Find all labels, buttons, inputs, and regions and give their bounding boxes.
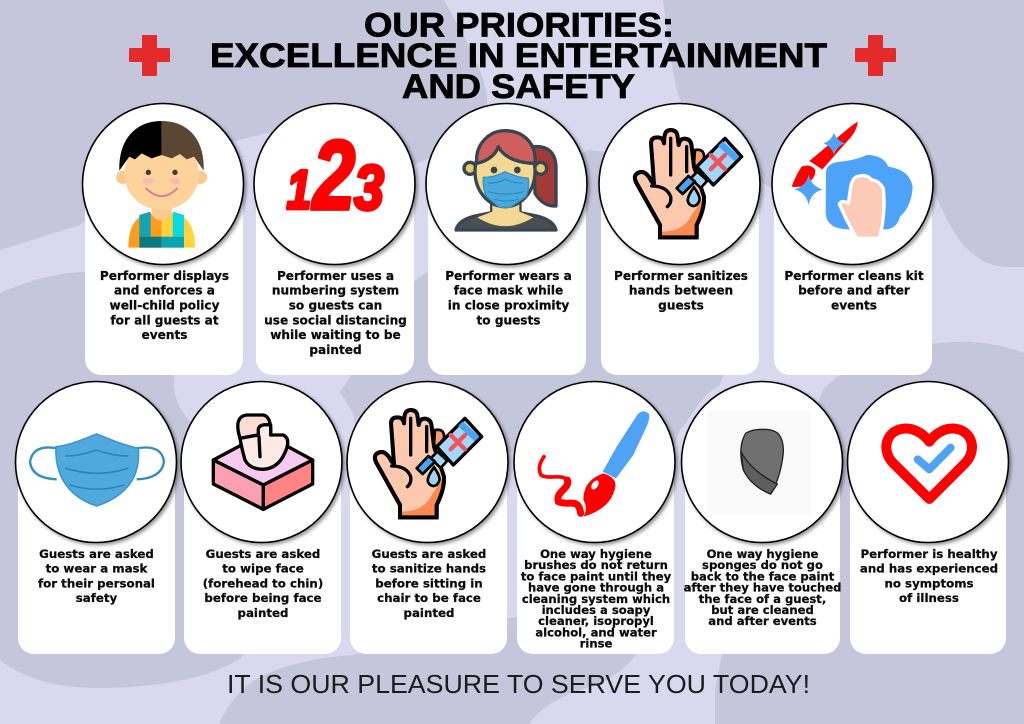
panel: sanitizes hands [599, 104, 760, 375]
icon: left red cross [129, 35, 170, 76]
text: cleans kit: Performer cleans kit [784, 269, 924, 283]
text: guests wipe face: painted [238, 606, 288, 620]
text: performer healthy [860, 547, 998, 605]
text: hygiene sponges: sponges do not go [702, 558, 823, 572]
text: hygiene brushes: to face paint until they [521, 569, 672, 583]
text: well-child policy: for all guests at [110, 313, 219, 327]
panel: well-child policy [82, 104, 244, 375]
text: hygiene sponges: after they have touched [684, 581, 841, 595]
icon: heart with check [886, 429, 972, 499]
text: hygiene brushes: includes a soapy [542, 603, 651, 617]
text: numbering system: while waiting to be [270, 328, 401, 342]
text: hygiene brushes: cleaning system which [522, 592, 670, 606]
text: face mask: in close proximity [448, 298, 569, 312]
text: guests wear mask: to wear a mask [46, 562, 149, 576]
icon: hand with sanitizer [375, 410, 482, 517]
text: guests sanitize hands [372, 547, 486, 620]
text: guests wipe face: to wipe face [222, 562, 304, 576]
text: guests sanitize hands: chair to be face [377, 591, 481, 605]
text: hygiene brushes: rinse [580, 637, 612, 651]
text: cleans kit: events [831, 298, 877, 312]
text: guests wear mask [38, 547, 155, 605]
panel: cleans kit [772, 104, 933, 375]
text: hygiene brushes [521, 547, 672, 651]
panel: hygiene sponges [682, 382, 842, 654]
text: numbering system [264, 269, 407, 357]
panel: performer healthy [848, 382, 1008, 654]
text: performer healthy: and has experienced [860, 562, 998, 576]
text: numbering system: numbering system [272, 284, 399, 298]
text: performer healthy: Performer is healthy [860, 547, 998, 561]
text: cleans kit [784, 269, 924, 312]
text: cleans kit: before and after [798, 284, 910, 298]
panel: guests wipe face [181, 382, 342, 654]
title: OUR PRIORITIES: [364, 6, 674, 44]
text: numbering system: use social distancing [264, 313, 407, 327]
text: performer healthy: of illness [899, 591, 959, 605]
panel: face mask [426, 104, 587, 375]
icon: woman wearing mask [456, 131, 556, 230]
text: guests sanitize hands: to sanitize hands [372, 562, 486, 576]
text: guests sanitize hands: painted [404, 606, 454, 620]
panel: hygiene brushes [514, 382, 675, 654]
text: guests wipe face: Guests are asked [206, 547, 320, 561]
icon: right red cross [855, 35, 896, 76]
text: hygiene brushes: One way hygiene [540, 547, 652, 561]
panel: guests sanitize hands [347, 382, 508, 654]
text: well-child policy: well-child policy [110, 298, 220, 312]
text: well-child policy: Performer displays [100, 269, 229, 283]
text: sanitizes hands: Performer sanitizes [614, 269, 748, 283]
text: hygiene sponges: but are cleaned [711, 603, 814, 617]
text: well-child policy: events [142, 328, 187, 342]
title: AND SAFETY [402, 68, 635, 106]
text: guests wipe face: (forehead to chin) [203, 576, 323, 590]
text: face mask [445, 269, 572, 327]
text: hygiene sponges: the face of a guest, [699, 592, 826, 606]
icon: 123 numbers: 3 [354, 154, 384, 224]
text: hygiene brushes: brushes do not return [524, 558, 668, 572]
text: guests wear mask: Guests are asked [39, 547, 154, 561]
text: hygiene sponges [684, 547, 841, 628]
text: face mask: face mask while [454, 284, 563, 298]
text: face mask: Performer wears a [445, 269, 572, 283]
text: sanitizes hands: hands between [629, 284, 733, 298]
text: guests wipe face: before being face [204, 591, 322, 605]
icon: 123 numbers: 1 [287, 159, 311, 220]
icon: brush and cleaning hand [792, 122, 913, 238]
icon: child [116, 121, 207, 248]
text: hygiene sponges: and after events [708, 614, 817, 628]
footer message: IT IS OUR PLEASURE TO SERVE YOU TODAY! [227, 671, 810, 699]
title: EXCELLENCE IN ENTERTAINMENT [210, 37, 827, 75]
text: face mask: to guests [477, 313, 540, 327]
icon: paint brush [539, 411, 649, 517]
icon: tissue box [213, 415, 313, 509]
text: guests wear mask: safety [76, 591, 118, 605]
text: hygiene brushes: alcohol, and water [535, 625, 657, 639]
text: sanitizes hands: guests [658, 298, 704, 312]
icon: hand with sanitizer [635, 130, 742, 237]
text: hygiene brushes: cleaner, isopropyl [538, 614, 654, 628]
text: sanitizes hands [614, 269, 748, 312]
panel: guests wear mask [16, 382, 176, 654]
text: guests wipe face [203, 547, 323, 620]
icon: makeup sponge [708, 411, 811, 514]
text: guests sanitize hands: before sitting in [375, 576, 483, 590]
text: performer healthy: no symptoms [884, 576, 974, 590]
text: guests wear mask: for their personal [38, 576, 155, 590]
text: guests sanitize hands: Guests are asked [372, 547, 486, 561]
icon: 123 numbers: 2 [311, 120, 355, 230]
text: hygiene sponges: One way hygiene [707, 547, 819, 561]
icon: surgical mask [30, 434, 164, 506]
text: numbering system: so guests can [289, 298, 382, 312]
title [210, 6, 827, 106]
text: well-child policy [100, 269, 229, 342]
icon: 123 numbers [287, 120, 384, 230]
text: well-child policy: and enforces a [114, 284, 215, 298]
text: numbering system: Performer uses a [277, 269, 394, 283]
text: hygiene sponges: back to the face paint [691, 569, 835, 583]
text: numbering system: painted [309, 343, 362, 357]
text: hygiene brushes: have gone through a [528, 581, 664, 595]
panel: numbering system [254, 104, 415, 375]
